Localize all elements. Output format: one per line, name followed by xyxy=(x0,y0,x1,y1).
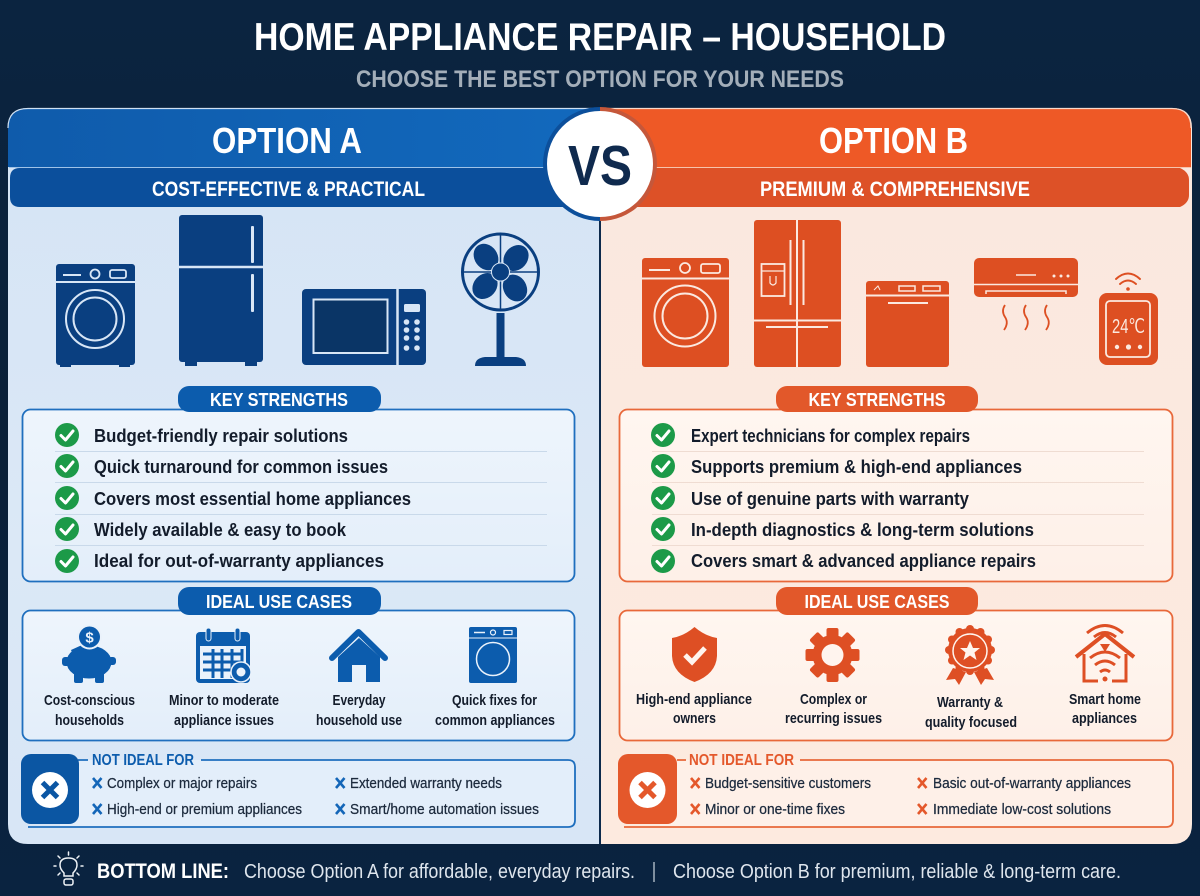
icon: award rosette xyxy=(945,625,995,685)
title: HOME APPLIANCE REPAIR – HOUSEHOLD xyxy=(254,16,946,59)
icon: microwave xyxy=(302,289,426,365)
icon: standing fan xyxy=(462,234,539,366)
label: everyday household use xyxy=(316,692,402,729)
label: quick fixes xyxy=(435,692,555,729)
label: cost-conscious households xyxy=(44,692,135,729)
label: complex issues: recurring issues xyxy=(785,710,882,727)
heading: key strengths B xyxy=(776,386,978,412)
heading: key strengths xyxy=(178,386,381,412)
icon: small washer xyxy=(469,627,517,683)
not ideal list B: Budget-sensitive customers xyxy=(705,775,871,792)
heading: not ideal for B: NOT IDEAL FOR xyxy=(689,752,794,769)
option A tagline band xyxy=(10,168,600,207)
label: high-end owners xyxy=(636,691,752,727)
label: quick fixes: common appliances xyxy=(435,712,555,729)
heading: key strengths B: KEY STRENGTHS xyxy=(808,389,946,410)
not ideal list B: Basic out-of-warranty appliances xyxy=(933,775,1131,792)
heading: key strengths: KEY STRENGTHS xyxy=(210,389,348,410)
label: everyday household use: household use xyxy=(316,712,402,729)
option B tagline band xyxy=(600,168,1189,207)
option B header xyxy=(600,108,1191,168)
label: smart home appliances xyxy=(1069,691,1141,727)
label: warranty focused: quality focused xyxy=(925,714,1017,731)
icon: piggy bank xyxy=(62,624,116,683)
option A header xyxy=(8,108,600,168)
ideal use cases box xyxy=(22,587,574,740)
label: quick fixes: Quick fixes for xyxy=(452,692,537,709)
VS badge: VS xyxy=(568,134,632,198)
panel: option B xyxy=(600,108,1192,844)
icon: smart thermostat: 24℃ xyxy=(1112,316,1145,338)
icon: washing machine premium xyxy=(642,258,729,367)
check list B: Covers smart & advanced appliance repairs xyxy=(691,550,1036,571)
icon: piggy bank: $ xyxy=(85,630,94,646)
VS badge xyxy=(543,107,657,221)
heading: ideal use cases xyxy=(178,587,381,615)
label: minor to moderate xyxy=(169,692,279,729)
check list: Ideal for out-of-warranty appliances xyxy=(94,550,384,571)
icon: refrigerator xyxy=(179,215,263,366)
heading: ideal use cases: IDEAL USE CASES xyxy=(206,591,352,612)
icon: smart home xyxy=(1076,626,1134,682)
label: high-end owners: High-end appliance xyxy=(636,691,752,708)
check list B xyxy=(651,423,1036,573)
not ideal list: High-end or premium appliances xyxy=(107,801,302,818)
check list: Widely available & easy to book xyxy=(94,519,347,540)
not ideal list: Smart/home automation issues xyxy=(350,801,539,818)
icon: light bulb xyxy=(54,852,83,885)
option B header: OPTION B xyxy=(819,120,968,161)
icon: house xyxy=(332,632,385,682)
bottom line label: BOTTOM LINE: xyxy=(97,860,229,883)
check list: Covers most essential home appliances xyxy=(94,488,411,509)
option A tagline band: COST-EFFECTIVE & PRACTICAL xyxy=(152,178,425,201)
icon: smart thermostat xyxy=(1099,274,1158,365)
not ideal list: Complex or major repairs xyxy=(107,775,257,792)
option B tagline band: PREMIUM & COMPREHENSIVE xyxy=(760,178,1030,201)
icon: air conditioner xyxy=(974,258,1078,330)
check list B: Expert technicians for complex repairs xyxy=(691,425,970,446)
icon: shield xyxy=(672,627,717,682)
check list B: In-depth diagnostics & long-term solutions xyxy=(691,519,1034,540)
label: minor to moderate: Minor to moderate xyxy=(169,692,279,709)
check list B: Use of genuine parts with warranty xyxy=(691,488,970,509)
label: smart home appliances: appliances xyxy=(1072,710,1137,727)
key strengths box B xyxy=(620,386,1172,582)
icon: washing machine xyxy=(56,264,135,367)
not ideal for box B xyxy=(618,752,1173,827)
heading: not ideal for: NOT IDEAL FOR xyxy=(92,752,194,769)
check list xyxy=(55,423,411,573)
option A header: OPTION A xyxy=(212,120,362,161)
label: warranty focused: Warranty & xyxy=(937,694,1003,711)
ideal use cases box B xyxy=(620,587,1172,740)
label: smart home appliances: Smart home xyxy=(1069,691,1141,708)
icon: gear xyxy=(806,628,860,682)
icon: dishwasher xyxy=(866,281,949,367)
subtitle: CHOOSE THE BEST OPTION FOR YOUR NEEDS xyxy=(356,66,844,93)
check list B: Supports premium & high-end appliances xyxy=(691,456,1022,477)
label: high-end owners: owners xyxy=(673,710,716,727)
not ideal list xyxy=(93,775,539,818)
icon: calendar xyxy=(196,628,251,683)
bottom line option B: Choose Option B for premium, reliable & long-term care. xyxy=(673,861,1121,883)
label: cost-conscious households: Cost-conscious xyxy=(44,692,135,709)
panel: option A xyxy=(8,108,600,844)
heading: ideal use cases B xyxy=(776,587,978,615)
icon: not ideal x badge B xyxy=(618,754,677,824)
bottom line option A: Choose Option A for affordable, everyday repairs. xyxy=(244,861,635,883)
check list: Budget-friendly repair solutions xyxy=(94,425,348,446)
label: everyday household use: Everyday xyxy=(332,692,386,709)
not ideal list: Extended warranty needs xyxy=(350,775,502,792)
label: minor to moderate: appliance issues xyxy=(174,712,274,729)
not ideal list B: Minor or one-time fixes xyxy=(705,801,845,818)
label: complex issues xyxy=(785,691,882,727)
label: complex issues: Complex or xyxy=(800,691,867,708)
key strengths box xyxy=(22,386,574,582)
label: cost-conscious households: households xyxy=(55,712,124,729)
icon: not ideal x badge xyxy=(21,754,79,824)
center divider xyxy=(599,207,601,844)
heading: ideal use cases B: IDEAL USE CASES xyxy=(804,591,950,612)
bottom line bar xyxy=(54,852,1121,885)
icon: french door refrigerator xyxy=(754,220,841,367)
not ideal for box xyxy=(21,752,575,827)
not ideal list B: Immediate low-cost solutions xyxy=(933,801,1111,818)
check list: Quick turnaround for common issues xyxy=(94,456,388,477)
label: warranty focused xyxy=(925,694,1017,731)
not ideal list B xyxy=(691,775,1131,818)
